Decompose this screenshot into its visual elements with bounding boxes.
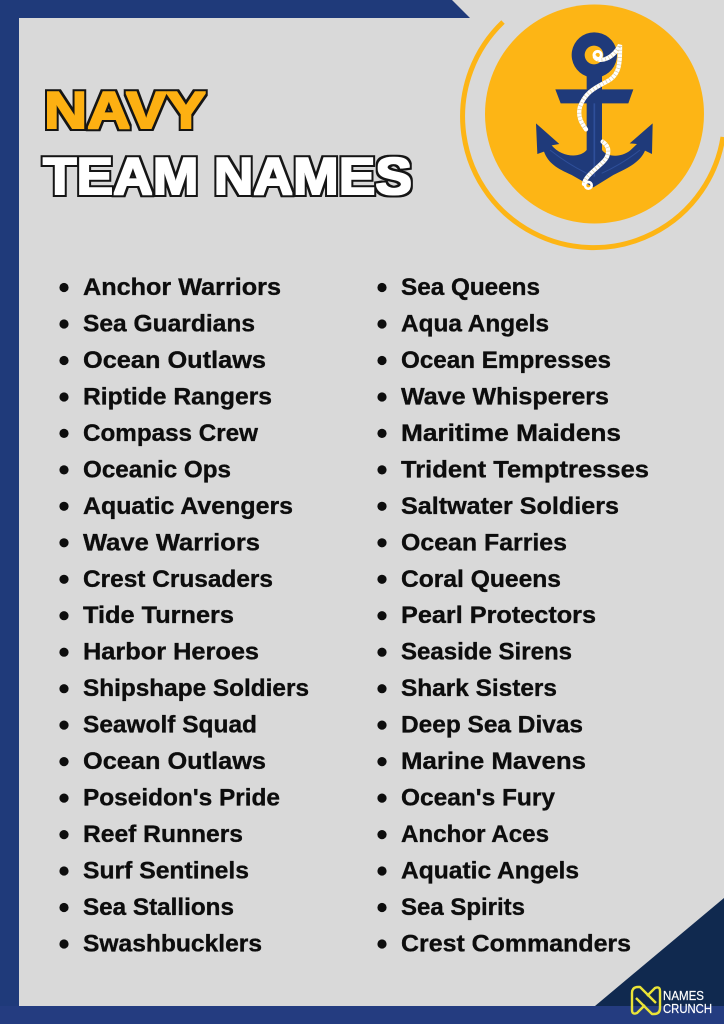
name item: Maritime Maidens bbox=[401, 420, 621, 447]
name item: Compass Crew bbox=[83, 420, 259, 447]
name item: Sea Spirits bbox=[401, 894, 525, 921]
name item: Wave Whisperers bbox=[401, 383, 609, 410]
name item: Marine Mavens bbox=[401, 748, 586, 775]
name item: Ocean Empresses bbox=[401, 347, 611, 374]
name item: Harbor Heroes bbox=[83, 639, 259, 666]
name item: Sea Queens bbox=[401, 274, 540, 301]
title line: TEAM NAMES: TEAM NAMES bbox=[43, 148, 412, 206]
name item: Ocean Farries bbox=[401, 529, 567, 556]
name item: Riptide Rangers bbox=[83, 383, 272, 410]
name item: Oceanic Ops bbox=[83, 456, 231, 483]
name item: Ocean Outlaws bbox=[83, 748, 266, 775]
name item: Seawolf Squad bbox=[83, 712, 257, 739]
dark corner triangle bbox=[595, 898, 724, 1024]
name item: Shark Sisters bbox=[401, 675, 557, 702]
name item: Deep Sea Divas bbox=[401, 712, 583, 739]
name item: Shipshape Soldiers bbox=[83, 675, 309, 702]
name item: Crest Commanders bbox=[401, 930, 631, 958]
name item: Trident Temptresses bbox=[401, 456, 649, 483]
name item: Tide Turners bbox=[83, 602, 234, 629]
logo wordmark: NAMES bbox=[663, 989, 704, 1003]
name item: Sea Stallions bbox=[83, 894, 234, 921]
name item: Reef Runners bbox=[83, 821, 243, 848]
name item: Crest Crusaders bbox=[83, 566, 273, 593]
name item: Wave Warriors bbox=[83, 529, 260, 556]
title bbox=[43, 82, 412, 206]
name item: Swashbucklers bbox=[83, 930, 262, 958]
name item: Anchor Warriors bbox=[83, 274, 281, 301]
list: left column bbox=[59, 274, 309, 958]
name item: Aqua Angels bbox=[401, 310, 549, 338]
name item: Ocean's Fury bbox=[401, 785, 555, 812]
name item: Surf Sentinels bbox=[83, 858, 249, 884]
name item: Ocean Outlaws bbox=[83, 347, 266, 374]
name item: Sea Guardians bbox=[83, 310, 255, 338]
navy frame: bottom band bbox=[0, 1006, 724, 1024]
name item: Aquatic Angels bbox=[401, 858, 579, 884]
name item: Pearl Protectors bbox=[401, 602, 596, 629]
navy frame: top and left band bbox=[0, 0, 470, 1006]
name item: Anchor Aces bbox=[401, 821, 549, 848]
decorative ring arc bbox=[463, 22, 723, 248]
name item: Seaside Sirens bbox=[401, 639, 572, 666]
logo: Names Crunch bbox=[632, 987, 712, 1016]
title line: NAVY: NAVY bbox=[44, 82, 206, 140]
name item: Saltwater Soldiers bbox=[401, 493, 619, 520]
logo: Names Crunch: CRUNCH bbox=[663, 1002, 712, 1016]
name item: Coral Queens bbox=[401, 566, 561, 593]
list: right column bbox=[377, 274, 649, 958]
name item: Poseidon's Pride bbox=[83, 785, 280, 812]
name item: Aquatic Avengers bbox=[83, 493, 293, 520]
icon: logo N mark bbox=[632, 987, 660, 1014]
icon: anchor badge bbox=[485, 4, 704, 224]
